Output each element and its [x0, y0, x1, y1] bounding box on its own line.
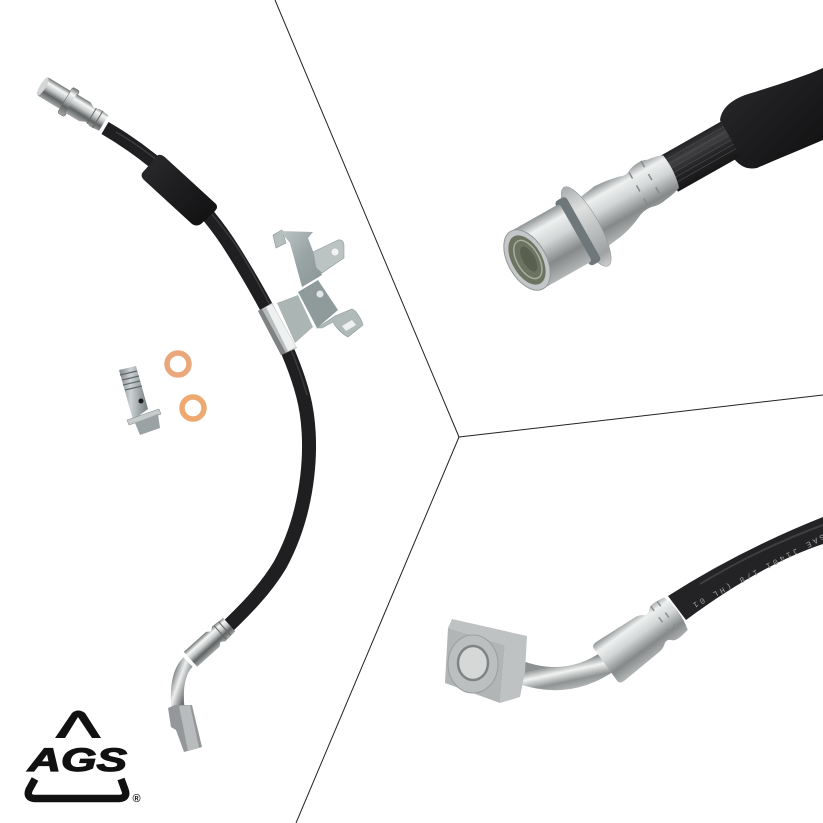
- square block back: [448, 619, 527, 703]
- crimp dents: [627, 161, 664, 209]
- crimp close-up: [591, 592, 692, 684]
- lower end fitting: [168, 705, 202, 752]
- flange washer: [553, 181, 620, 272]
- bent tube close-up: [512, 660, 610, 679]
- mounting bracket: [258, 230, 363, 355]
- copper washer bottom: [182, 397, 204, 419]
- banjo bolt: [119, 366, 161, 435]
- bent steel tube: [177, 662, 188, 708]
- bracket upper tab: [313, 240, 344, 273]
- detail: bottom connector: [445, 517, 823, 703]
- AGS logo: [27, 710, 141, 805]
- rubber sleeve: [142, 155, 217, 226]
- braided hose close-up: [658, 122, 741, 192]
- full hose assembly: [33, 72, 363, 752]
- bracket lower tab: [317, 309, 363, 337]
- lower tab slot: [342, 320, 356, 331]
- hex nut: [554, 196, 602, 267]
- hose marking: SAE J1401 1/8 (HL 01: [691, 531, 823, 609]
- internal thread: [501, 229, 553, 291]
- hose highlight: [116, 132, 307, 395]
- bracket clip plate: [277, 295, 313, 343]
- top fitting: [33, 72, 111, 136]
- bolt hex head: [135, 414, 160, 435]
- square block face: [445, 628, 505, 703]
- bracket top flange: [273, 230, 286, 248]
- bolt flange: [127, 409, 161, 425]
- threaded barrel: [511, 204, 592, 289]
- plate hole: [316, 290, 324, 298]
- copper washer top: [167, 353, 189, 375]
- block bore: [458, 646, 488, 680]
- panel dividers: [275, 0, 823, 823]
- logo bracket: [28, 779, 126, 798]
- lower crimp fitting: [184, 617, 236, 667]
- block ring: [448, 635, 498, 693]
- clip around hose: [258, 303, 297, 355]
- bracket upper arm: [280, 231, 322, 287]
- bracket middle plate: [298, 280, 338, 328]
- sleeve close-up: [720, 68, 823, 168]
- hose close-up: [668, 517, 823, 620]
- bolt hole: [138, 398, 144, 404]
- detail: top connector: [488, 68, 823, 309]
- crimp dents close-up: [651, 601, 682, 640]
- upper tab hole: [332, 248, 338, 256]
- registered mark: ®: [132, 793, 141, 805]
- bolt shaft: [119, 366, 148, 420]
- logo chevron: [55, 710, 101, 738]
- crimp body: [577, 149, 690, 247]
- hose highlight line: [700, 525, 823, 584]
- bolt threads: [120, 371, 142, 390]
- barrel mouth: [494, 222, 560, 298]
- logo wordmark: AGS: [27, 742, 128, 778]
- hose body: [105, 128, 309, 632]
